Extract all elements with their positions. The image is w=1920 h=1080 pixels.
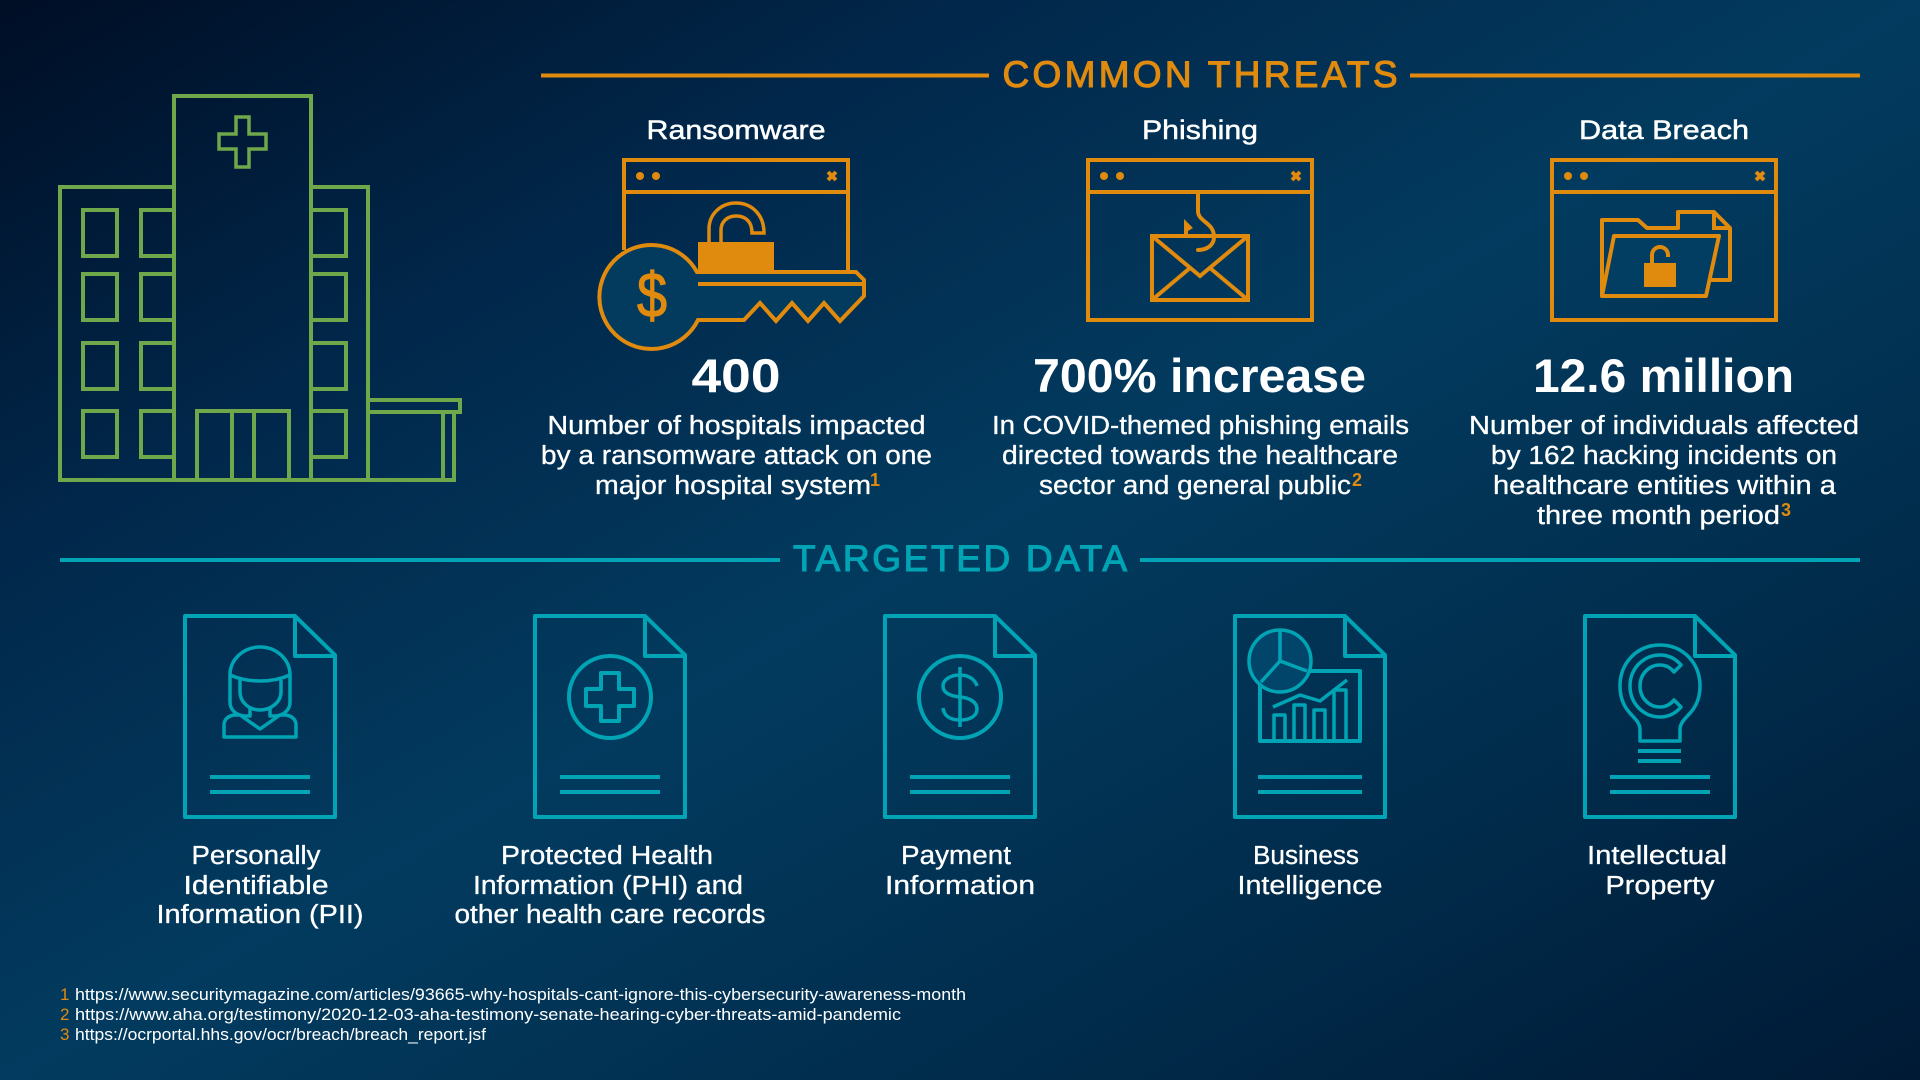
icon: browser window with hooked envelope (1088, 160, 1312, 320)
subheading: data breach: Data Breach (1579, 115, 1749, 145)
panel: payment information (885, 616, 1035, 900)
label: payment: Information (885, 872, 1035, 900)
description: data breach: healthcare entities within a (1493, 472, 1837, 500)
description: ransomware: by a ransomware attack on one (541, 442, 932, 470)
icon: browser window with folder and padlock (1552, 160, 1776, 320)
label: payment (885, 842, 1035, 900)
description: phishing: sector and general public (1039, 472, 1351, 500)
label: PII: Personally (192, 842, 321, 870)
panel: ransomware (541, 115, 932, 500)
description: ransomware (541, 412, 932, 500)
panel: phishing (992, 115, 1409, 500)
statistic: 700% increase: 700% increase (1033, 349, 1366, 402)
panel: business intelligence (1235, 616, 1385, 900)
description: phishing (992, 412, 1409, 500)
description: data breach: Number of individuals affected (1469, 412, 1859, 440)
label: intellectual property (1587, 842, 1727, 900)
description: data breach (1469, 412, 1859, 530)
panel: protected health information (454, 616, 766, 929)
subheading: ransomware: Ransomware (646, 115, 826, 145)
heading: targeted data: TARGETED DATA (793, 538, 1127, 579)
panel: data breach (1469, 115, 1859, 530)
footnotes: 1 (60, 985, 69, 1004)
description: ransomware: Number of hospitals impacted (548, 412, 926, 440)
icon: document with dollar coin (885, 616, 1035, 817)
label: business intelligence: Business (1253, 842, 1359, 870)
icon: document with copyright light bulb (1585, 616, 1735, 817)
footnotes: https://www.aha.org/testimony/2020-12-03-aha-testimony-senate-hearing-cyber-threats-amid-pandemic (75, 1005, 902, 1024)
footnotes: https://www.securitymagazine.com/articles/93665-why-hospitals-cant-ignore-this-cybersecurity-awareness-month (75, 985, 966, 1004)
label: business intelligence: Intelligence (1238, 872, 1382, 900)
icon: hospital building (60, 96, 460, 480)
icon: document with person (185, 616, 335, 817)
label: PII (156, 842, 364, 929)
panel: personally identifiable information (156, 616, 364, 929)
label: PHI: Protected Health (501, 842, 713, 870)
description: phishing: In COVID-themed phishing emails (992, 412, 1409, 440)
icon: document with medical cross (535, 616, 685, 817)
label: PHI: Information (PHI) and (473, 872, 743, 900)
label: PII: Identifiable (184, 872, 328, 900)
heading: common threats: COMMON THREATS (1002, 54, 1398, 95)
description: phishing: 2 (1352, 470, 1362, 490)
panel: intellectual property (1585, 616, 1735, 900)
label: intellectual property: Property (1606, 872, 1715, 900)
footnotes: 2 (60, 1005, 69, 1024)
icon: document with charts (1235, 616, 1385, 817)
description: ransomware: 1 (870, 470, 880, 490)
description: phishing: directed towards the healthcare (1002, 442, 1398, 470)
footnotes: https://ocrportal.hhs.gov/ocr/breach/breach_report.jsf (75, 1025, 486, 1044)
label: payment: Payment (901, 842, 1011, 870)
statistic: 400: 400 (692, 349, 780, 402)
description: data breach: 3 (1781, 500, 1791, 520)
footnotes: 3 (60, 1025, 69, 1044)
label: intellectual property: Intellectual (1587, 842, 1727, 870)
label: business intelligence (1238, 842, 1382, 900)
icon: browser window with padlock and key (599, 160, 864, 349)
label: PHI: other health care records (454, 901, 766, 929)
description: ransomware: major hospital system (595, 472, 871, 500)
label: PHI (454, 842, 766, 929)
statistic: 12.6 million: 12.6 million (1533, 349, 1794, 402)
subheading: phishing: Phishing (1142, 115, 1258, 145)
description: data breach: three month period (1537, 502, 1780, 530)
description: data breach: by 162 hacking incidents on (1491, 442, 1837, 470)
icon: browser window with padlock and key: $ (637, 261, 667, 331)
label: PII: Information (PII) (156, 901, 364, 929)
footnotes (60, 985, 966, 1044)
